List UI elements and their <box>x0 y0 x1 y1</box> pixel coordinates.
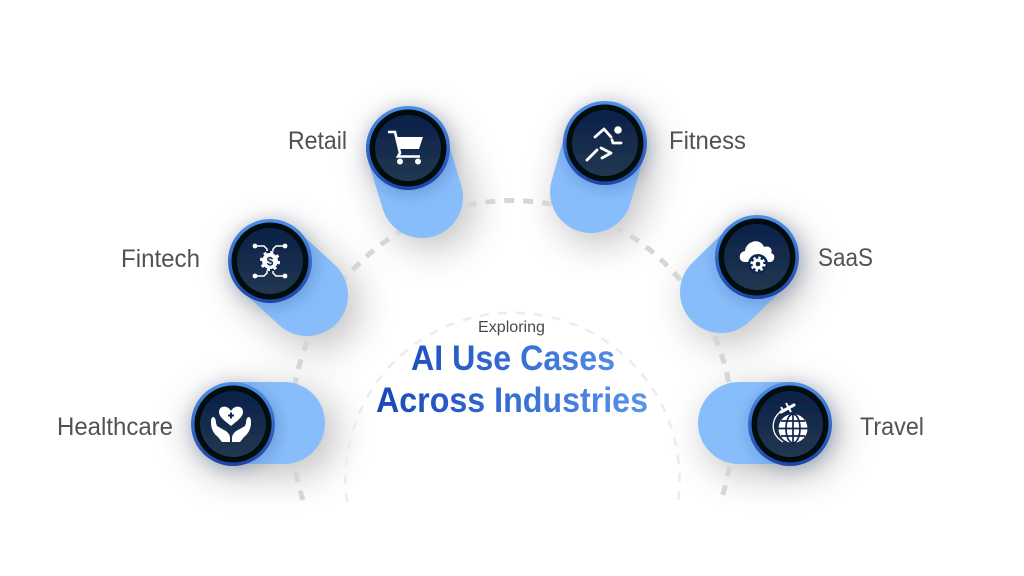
item: Retail <box>288 106 450 197</box>
label: Fintech <box>121 245 200 273</box>
outer dashed arc <box>291 201 733 500</box>
title block <box>376 319 648 420</box>
heading line 2: Across Industries <box>376 381 648 420</box>
item: Healthcare <box>57 382 284 466</box>
capsule <box>407 148 422 197</box>
label: Retail <box>288 127 347 155</box>
icon: cloud with gear <box>740 241 774 274</box>
item: Fintech <box>121 219 312 303</box>
capsule <box>270 261 307 295</box>
icon: dollar gear circuit: $ <box>267 254 274 268</box>
item: Travel <box>739 382 924 466</box>
medallion <box>228 219 312 303</box>
item: Fitness <box>563 101 746 192</box>
capsule <box>739 382 790 464</box>
label: Healthcare <box>57 413 173 441</box>
capsule shadows <box>233 153 798 433</box>
subtitle: Exploring <box>478 319 545 336</box>
inner dashed arc <box>346 313 680 502</box>
icon: runner <box>587 126 622 160</box>
medallion <box>748 382 832 466</box>
medallion <box>715 215 799 299</box>
icon: dollar gear circuit <box>253 244 287 278</box>
medallion <box>366 106 450 190</box>
icon: heart in hands <box>211 407 251 442</box>
capsule <box>721 257 757 292</box>
medallion <box>191 382 275 466</box>
icon: shopping cart <box>388 132 423 164</box>
capsule <box>591 143 605 192</box>
icon: globe with plane <box>773 403 808 443</box>
label: SaaS <box>818 244 873 272</box>
label: Travel <box>860 413 924 441</box>
capsule <box>233 382 284 464</box>
heading line 1: AI Use Cases <box>411 339 615 378</box>
item: SaaS <box>715 215 873 299</box>
label: Fitness <box>669 127 746 155</box>
medallion <box>563 101 647 185</box>
